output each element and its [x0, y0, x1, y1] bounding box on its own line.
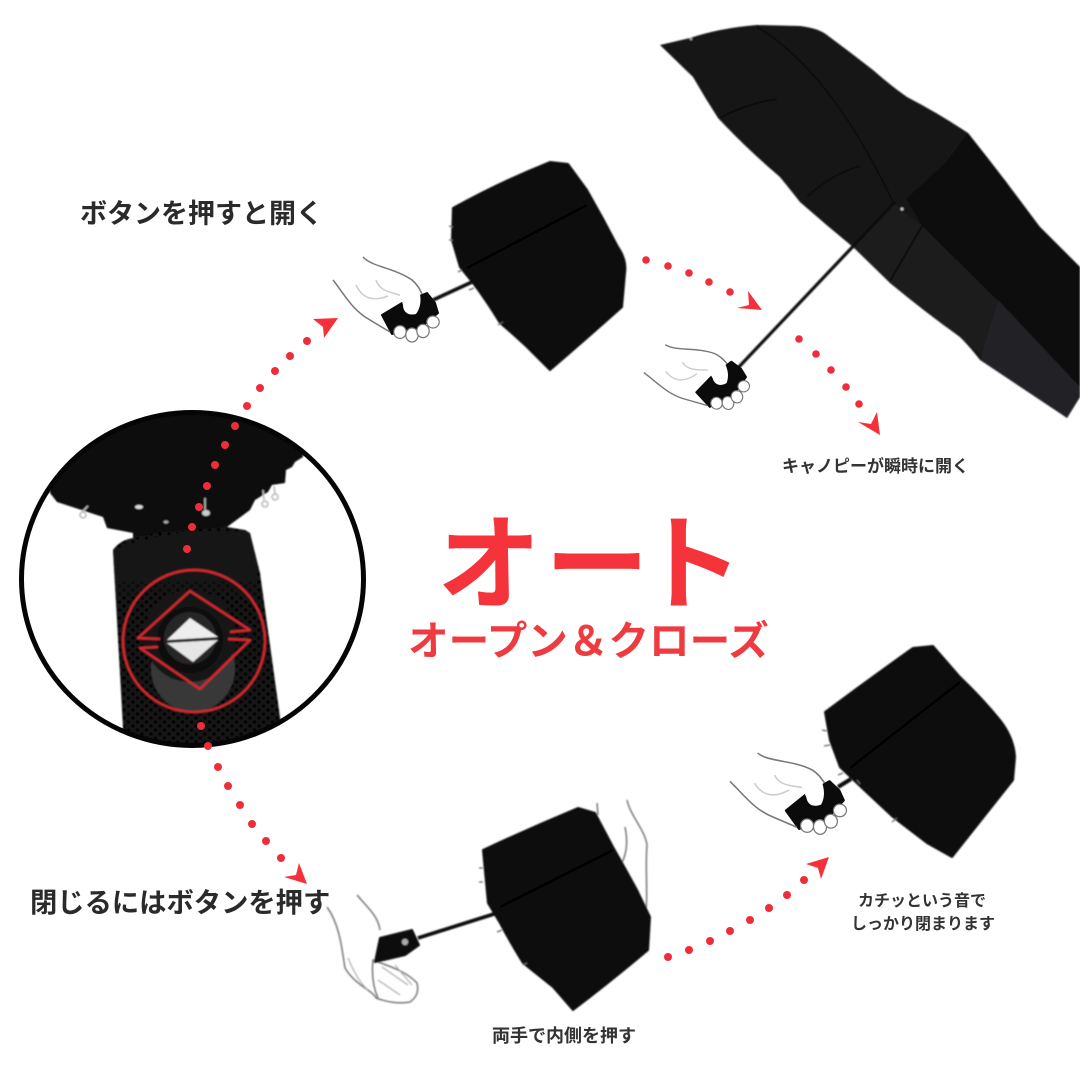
button oval: [150, 652, 236, 712]
dotted arrow: circle to bottom hand: [197, 722, 307, 884]
open umbrella with hand: [638, 25, 1080, 428]
canopy lower panel: [853, 202, 997, 357]
right hand pressing: [597, 800, 647, 910]
silver parts: [80, 486, 278, 518]
shaft: [736, 202, 895, 370]
hand: [638, 326, 754, 428]
caption: canopy opens instantly: キャノピーが瞬時に開く: [782, 456, 969, 476]
hand: [333, 257, 439, 342]
red ring: [123, 570, 265, 712]
closed umbrella bottom right with hand: [726, 646, 1015, 857]
caption: press inside with both hands: 両手で内側を押す: [492, 1026, 636, 1046]
hand: [726, 742, 849, 846]
label: open by button: ボタンを押すと開く: [80, 199, 323, 229]
dotted arrow: open umbrella to caption: [795, 335, 880, 435]
canopy detail: [50, 400, 303, 538]
shaft: [418, 914, 494, 938]
caption: click closes: カチッという音で: [858, 892, 986, 910]
dotted arrow: bottom umbrella to right umbrella: [664, 857, 829, 961]
dotted arrow: closed to open umbrella: [642, 256, 762, 310]
caption: click closes: しっかり閉まります: [851, 915, 995, 933]
magnified button circle: [22, 400, 364, 760]
circle ring: [22, 412, 364, 746]
title: オート: [437, 508, 743, 624]
dotted arrow: circle to top hand: [183, 318, 338, 553]
white diamond: [167, 618, 218, 640]
closed umbrella bottom with two hands: [327, 800, 650, 1010]
subtitle: オープン＆クローズ: [408, 618, 769, 664]
handle body: [113, 527, 285, 760]
canopy edge panel: [980, 300, 1080, 418]
closed umbrella top with hand: [333, 162, 625, 370]
canopy outline: [660, 25, 1080, 418]
left hand: [327, 895, 418, 1003]
label: close by button: 閉じるにはボタンを押す: [30, 887, 330, 918]
canopy lit panel: [718, 99, 893, 247]
handle: [375, 930, 419, 962]
canopy dark panel: [907, 133, 1080, 387]
